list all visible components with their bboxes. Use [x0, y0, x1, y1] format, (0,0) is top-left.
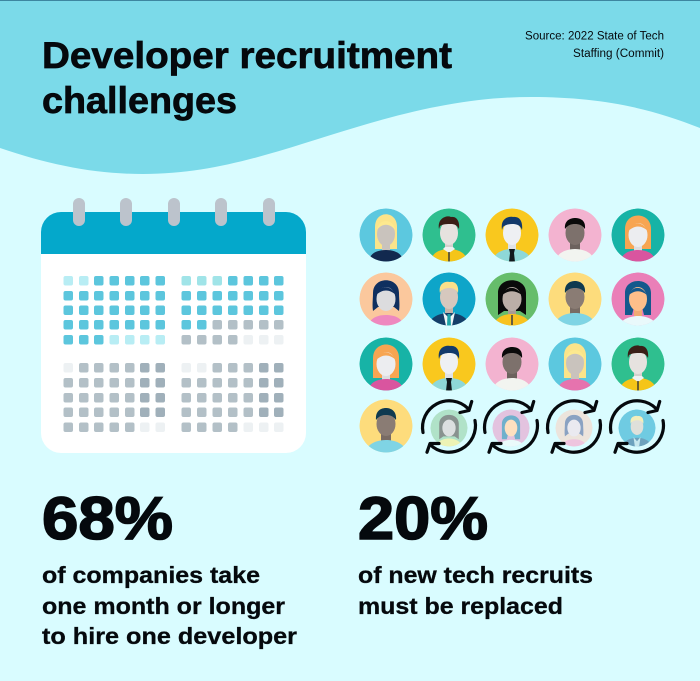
- source note: Source: 2022 State of Tech: [525, 30, 664, 42]
- avatar: man with tie on yellow: [486, 208, 538, 262]
- avatar: red-haired woman on teal: [360, 338, 412, 391]
- text block: 68% description: one month or longer: [42, 593, 285, 619]
- source note: Staffing (Commit): [573, 48, 664, 60]
- avatar: dark-haired woman on peach: [360, 272, 412, 326]
- avatar: blond man in suit on blue: [422, 272, 476, 326]
- avatar: blue-haired woman on pink: [612, 272, 664, 326]
- avatar: dark-haired man on green: [422, 208, 476, 262]
- calendar rings: [73, 198, 275, 226]
- calendar header: [41, 212, 306, 254]
- avatar: dark-skinned man on pink: [548, 208, 602, 262]
- text block: 20% description: [358, 562, 593, 619]
- title: Developer recruitment: [42, 35, 452, 76]
- stat: 20%: 20%: [358, 485, 488, 552]
- text block: 68% description: to hire one developer: [42, 623, 297, 649]
- source note: [525, 30, 664, 60]
- text block: 20% description: must be replaced: [358, 593, 563, 619]
- replaced avatar: faded man on blue with refresh arrows: [611, 401, 663, 452]
- title: challenges: [42, 80, 237, 121]
- calendar page: [41, 250, 306, 453]
- text block: 68% description: [42, 562, 297, 649]
- text block: 20% description: of new tech recruits: [358, 562, 593, 588]
- title: [42, 35, 452, 121]
- avatar: black-haired woman on green: [486, 272, 538, 326]
- avatar grid: [360, 208, 664, 453]
- avatar: man with tie on yellow: [422, 338, 476, 391]
- avatar: dark-skinned man on pale yellow: [360, 400, 412, 453]
- avatar: dark-skinned man on pale yellow: [548, 272, 602, 326]
- calendar icon: [41, 198, 306, 453]
- avatar: dark-haired man on green: [612, 338, 664, 391]
- replaced avatar: faded woman on lilac with refresh arrows: [485, 401, 537, 452]
- header wave band: [0, 0, 700, 174]
- replaced avatar: faded woman on beige with refresh arrows: [548, 401, 600, 452]
- calendar day grid: [64, 276, 284, 432]
- avatar: blonde woman on blue: [360, 208, 412, 262]
- text block: 68% description: of companies take: [42, 562, 260, 588]
- replaced avatar: faded woman on green with refresh arrows: [423, 401, 475, 452]
- stat: 68%: 68%: [42, 485, 173, 552]
- avatar: blonde woman on blue with pink top: [548, 338, 602, 391]
- avatar: dark-skinned man on pink: [486, 338, 538, 391]
- avatar: red-haired woman on teal: [612, 208, 664, 262]
